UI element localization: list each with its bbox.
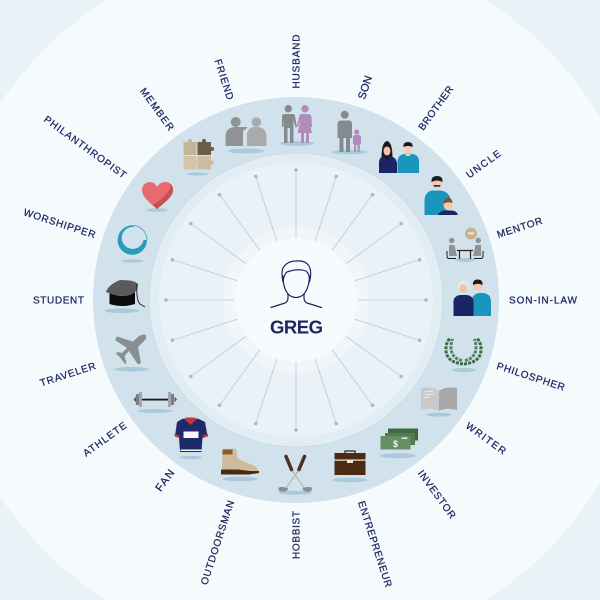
icon: son [332, 111, 367, 154]
centre halo [223, 227, 369, 373]
labels: PHILANTHROPIST [41, 114, 128, 181]
icon: son-in-law [454, 280, 491, 316]
icon: mentor [447, 228, 483, 262]
spokes [164, 168, 428, 432]
icon: brother [379, 141, 419, 173]
labels: WRITER [463, 421, 508, 457]
labels: SON-IN-LAW [509, 296, 578, 307]
panel: inner ring [149, 153, 443, 447]
icon: athlete barbell [134, 392, 177, 413]
icon: entrepreneur briefcase [332, 451, 368, 482]
labels: UNCLE [465, 148, 504, 181]
icon: uncle [424, 176, 458, 215]
labels: INVESTOR [415, 469, 457, 521]
icon: hobbist golf clubs [278, 456, 312, 495]
labels: BROTHER [417, 84, 456, 133]
icon: traveler plane [114, 335, 149, 372]
labels: HUSBAND [292, 34, 303, 88]
icon: outdoorsman boot [221, 448, 259, 481]
icon: writer book [421, 387, 457, 417]
icon: philanthropist heart [142, 182, 173, 212]
panel: role ring [93, 97, 499, 503]
labels: ATHLETE [81, 420, 129, 459]
icon: Greg head outline [271, 261, 322, 308]
icon: investor money [380, 428, 418, 458]
labels: OUTDOORSMAN [199, 499, 237, 586]
labels: SON [356, 74, 375, 101]
panel: inner disc [159, 163, 433, 437]
labels: ENTREPRENEUR [355, 500, 393, 589]
centre disc [235, 239, 357, 361]
labels: WORSHIPPER [22, 207, 97, 241]
labels: STUDENT [33, 296, 84, 307]
icon: philosopher wreath [446, 338, 481, 372]
labels: MEMBER [137, 86, 176, 133]
icon: investor money: $ [393, 439, 398, 449]
icon: friend [226, 117, 266, 154]
icon: worshipper ring [118, 225, 147, 263]
labels: MENTOR [496, 216, 544, 241]
labels: FRIEND [212, 58, 235, 101]
icon: husband [280, 105, 314, 146]
icon: student graduation cap [104, 280, 145, 313]
labels: HOBBIST [292, 511, 303, 559]
labels: PHILOSPHER [495, 361, 566, 394]
title: GREG: GREG [270, 316, 323, 338]
icon: fan jersey [175, 418, 208, 459]
labels: TRAVELER [39, 361, 97, 389]
labels: FAN [154, 467, 177, 494]
icon: member puzzle [184, 139, 214, 176]
